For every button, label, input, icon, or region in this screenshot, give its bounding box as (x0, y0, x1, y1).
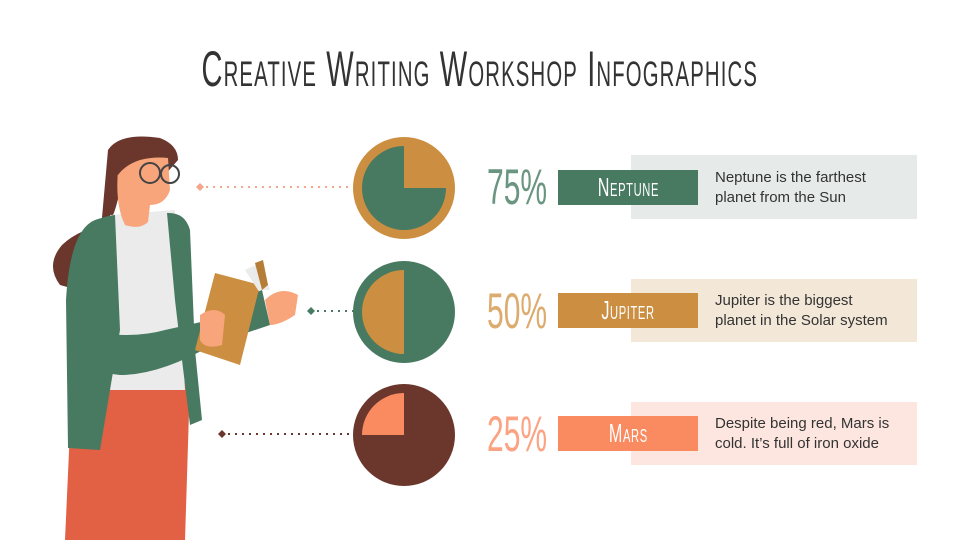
label: neptune: Neptune (597, 172, 659, 202)
percent: 25: 25% (487, 406, 547, 462)
shirt (100, 210, 185, 390)
connector: mars (218, 430, 354, 438)
hands (200, 310, 225, 347)
pie: neptune 75% (353, 137, 455, 239)
hair back (53, 136, 178, 292)
text: neptune: Neptune is the farthest planet from the Sun (715, 169, 866, 206)
percent: 75: 75% (487, 159, 547, 215)
connector: neptune (196, 183, 354, 191)
label: jupiter: Jupiter (601, 295, 655, 325)
label: mars: Mars (609, 418, 647, 448)
text: jupiter: Jupiter is the biggest planet in the Solar system (715, 292, 888, 329)
illustration: woman reading book (52, 136, 298, 540)
panel: jupiter (558, 279, 917, 342)
glasses (140, 163, 160, 183)
label: mars (558, 416, 698, 451)
label: jupiter (558, 293, 698, 328)
panel: mars (558, 402, 917, 465)
label: neptune (558, 170, 698, 205)
connector: jupiter (307, 307, 354, 315)
cardigan (66, 215, 120, 450)
panel: neptune (558, 155, 917, 219)
skirt (65, 380, 190, 540)
background box (631, 279, 917, 342)
title: Creative Writing Workshop Infographics (202, 41, 758, 97)
pie: jupiter 50% (353, 261, 455, 363)
book (195, 273, 260, 365)
text: mars: Despite being red, Mars is cold. It’s full of iron oxide (715, 415, 889, 452)
pie: mars 25% (353, 384, 455, 486)
hair top (108, 137, 178, 175)
background box (631, 155, 917, 219)
background box (631, 402, 917, 465)
percent: 50: 50% (487, 283, 547, 339)
neck/face (117, 154, 170, 227)
